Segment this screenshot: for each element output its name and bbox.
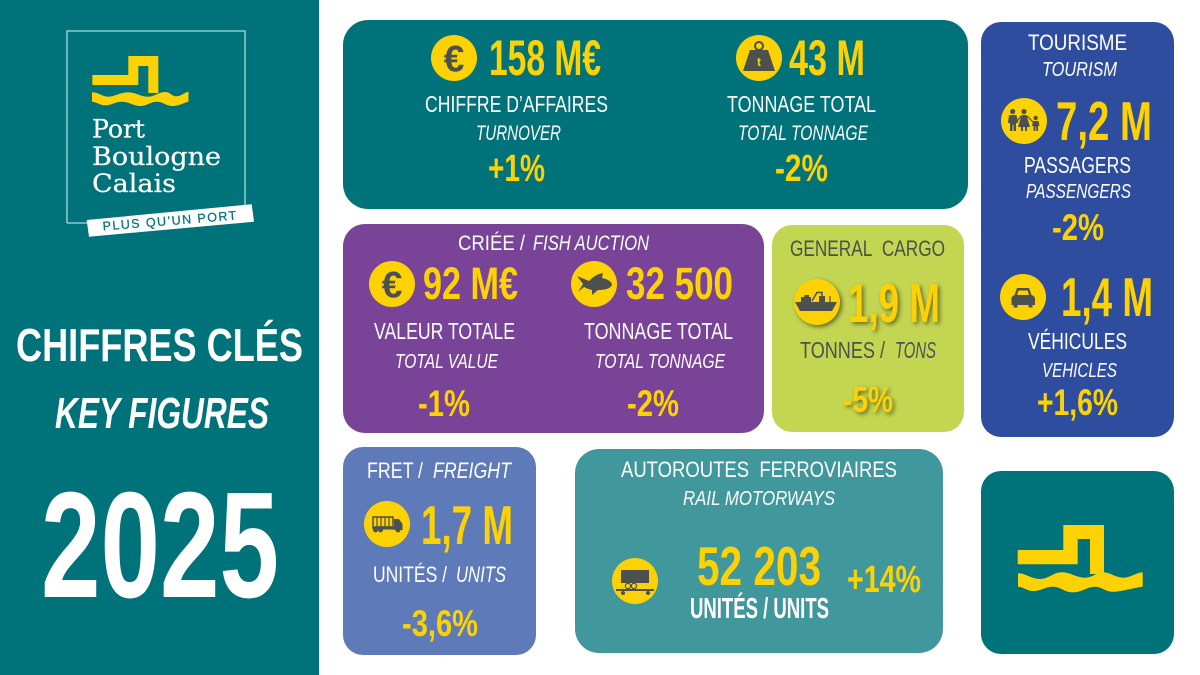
icon: car	[1000, 274, 1046, 320]
change: +14%: +14%	[847, 559, 921, 601]
figure: 52 203: 52 203	[697, 535, 821, 597]
label: valeur totale: VALEUR TOTALE	[374, 318, 515, 344]
label: tonnage total: TONNAGE TOTAL	[584, 318, 733, 344]
heading: tourism: TOURISM	[1042, 59, 1117, 81]
logo: Port Boulogne Calais	[67, 31, 254, 237]
label: unités / units: UNITÉS / UNITS	[690, 591, 829, 625]
icon: euro	[431, 35, 477, 81]
heading: criée / fish auction	[458, 232, 650, 255]
change: -5%: -5%	[843, 379, 893, 420]
panel: left sidebar	[0, 0, 319, 675]
panel: rail motorways	[575, 449, 943, 653]
figure: 1,7 M: 1,7 M	[421, 494, 513, 556]
logo: Port Boulogne Calais: Boulogne	[92, 142, 221, 171]
panel: port logo mark	[981, 471, 1174, 654]
label: tonnes / tons: TONS	[895, 337, 936, 363]
icon: weight	[736, 35, 782, 81]
heading: tourisme: TOURISME	[1028, 30, 1127, 55]
change: -2%: -2%	[627, 383, 679, 424]
figure: 92 M€: 92 M€	[423, 258, 518, 309]
label: passagers: PASSAGERS	[1024, 152, 1131, 178]
label: total tonnage: TOTAL TONNAGE	[595, 351, 726, 373]
figure: 158 M€: 158 M€	[489, 30, 601, 86]
heading: fret / freight: FRET /	[367, 458, 424, 483]
icon: euro: €	[382, 264, 402, 306]
panel: freight	[343, 447, 536, 655]
icon: euro: €	[444, 38, 464, 80]
panel: turnover and total tonnage	[343, 20, 968, 209]
heading: key figures: KEY FIGURES	[55, 389, 269, 438]
figure: 43 M: 43 M	[789, 30, 865, 86]
label: total tonnage: TOTAL TONNAGE	[738, 122, 869, 145]
icon: family	[1001, 98, 1047, 144]
label: véhicules: VÉHICULES	[1028, 328, 1127, 354]
heading: chiffres clés: CHIFFRES CLÉS	[16, 319, 303, 371]
figure: 32 500: 32 500	[626, 258, 733, 309]
label: passengers: PASSENGERS	[1026, 181, 1132, 203]
panel: tourism	[981, 22, 1174, 437]
change: +1%: +1%	[488, 148, 545, 190]
logo: Port Boulogne Calais: PLUS QU’UN PORT	[102, 209, 237, 233]
figure: 7,2 M: 7,2 M	[1056, 90, 1152, 152]
heading: fret / freight: FREIGHT	[433, 458, 512, 483]
label: unités / units: UNITS	[456, 562, 506, 587]
figure: 1,4 M: 1,4 M	[1061, 266, 1153, 328]
label: unités / units	[373, 562, 506, 587]
label: chiffre d'affaires: CHIFFRE D’AFFAIRES	[425, 91, 608, 117]
figure: 1,9 M: 1,9 M	[848, 272, 940, 334]
change: -3,6%: -3,6%	[402, 603, 478, 644]
change: +1,6%: +1,6%	[1037, 382, 1118, 423]
icon: ship	[794, 279, 840, 325]
label: vehicles: VEHICLES	[1042, 360, 1117, 382]
heading: general cargo: GENERAL CARGO	[790, 236, 945, 261]
label: unités / units: UNITÉS /	[373, 562, 448, 587]
icon: euro	[369, 261, 415, 307]
heading: rail motorways: RAIL MOTORWAYS	[683, 488, 836, 510]
change: -2%: -2%	[775, 148, 828, 190]
icon: fish	[571, 261, 617, 307]
change: -1%: -1%	[418, 383, 470, 424]
heading: autoroutes ferroviaires: AUTOROUTES FERROVIAIRES	[621, 457, 897, 482]
icon: rail wagon	[612, 558, 658, 604]
label: total value: TOTAL VALUE	[395, 351, 499, 373]
label: tonnes / tons: TONNES /	[800, 337, 885, 363]
panel: fish auction	[343, 224, 764, 433]
year 2025: 2025	[41, 460, 279, 629]
icon: weight: t	[757, 55, 761, 69]
heading: fret / freight	[367, 458, 512, 483]
panel: general cargo	[772, 225, 964, 432]
label: turnover: TURNOVER	[476, 122, 561, 145]
heading: criée / fish auction: CRIÉE /	[458, 232, 525, 255]
label: tonnage total: TONNAGE TOTAL	[727, 91, 876, 117]
icon: truck	[364, 501, 410, 547]
logo: Port Boulogne Calais: Calais	[92, 169, 176, 198]
logo: Port Boulogne Calais: Port	[92, 114, 145, 144]
change: -2%: -2%	[1052, 207, 1104, 248]
heading: criée / fish auction: FISH AUCTION	[533, 232, 650, 255]
